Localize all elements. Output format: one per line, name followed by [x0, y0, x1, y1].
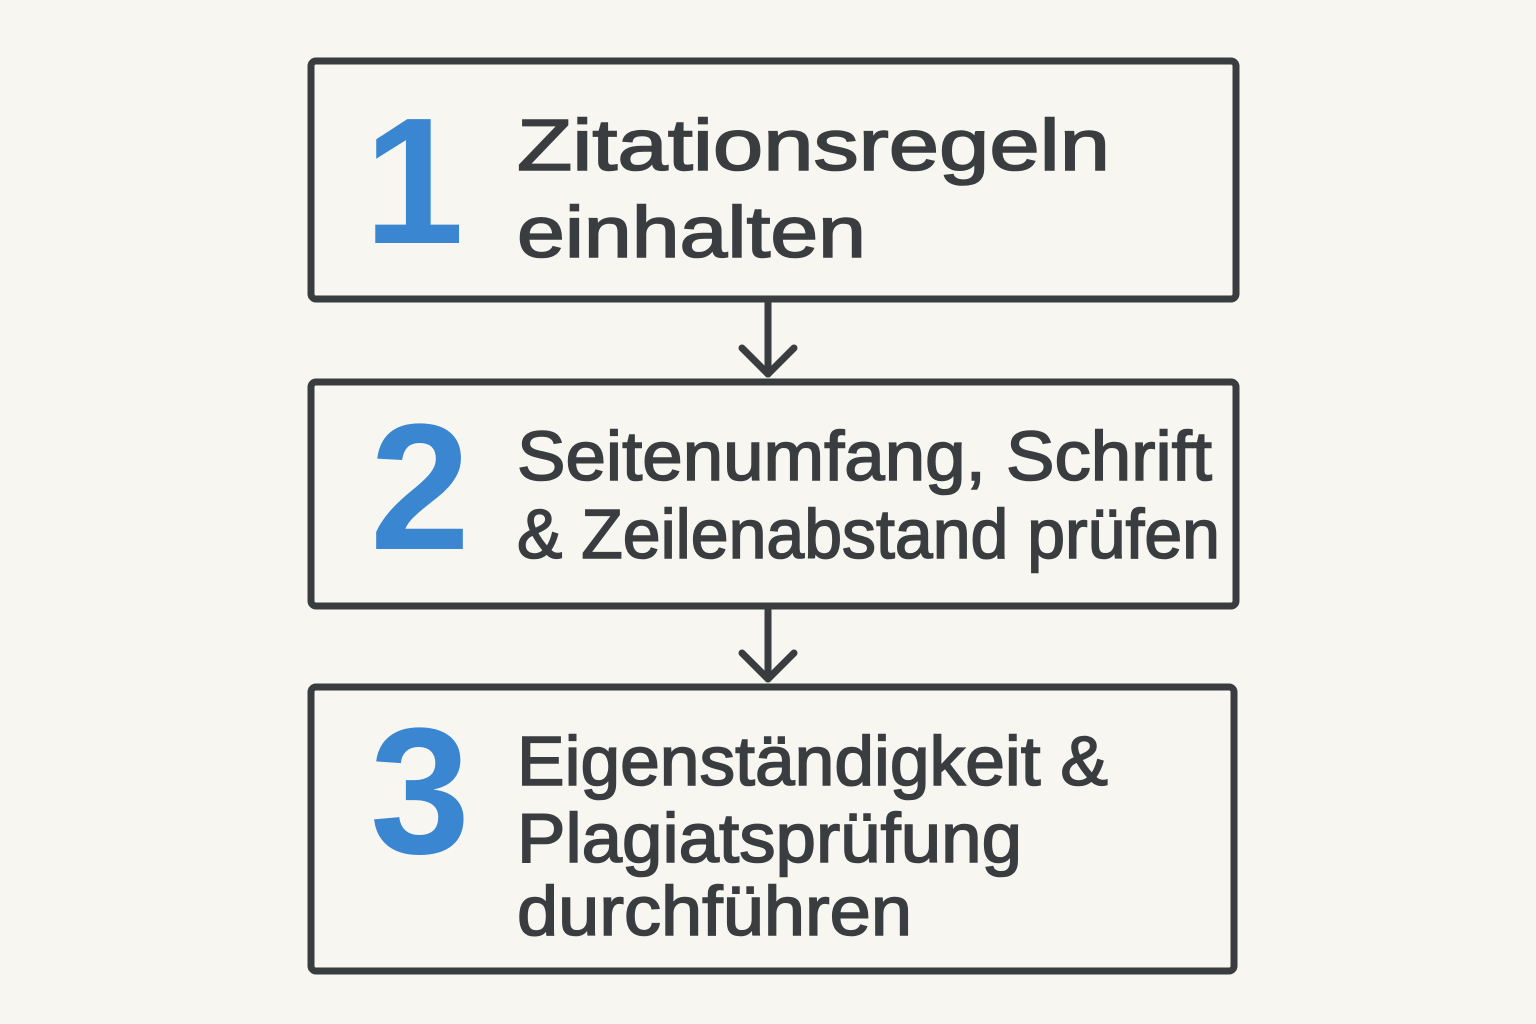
- arrow: 1 to 2: [742, 302, 794, 374]
- text: step 3: durchführen: [517, 872, 912, 950]
- text: step 2: Seitenumfang, Schrift: [517, 417, 1212, 495]
- text: step 2: [517, 417, 1220, 573]
- text: step 1: einhalten: [517, 193, 866, 273]
- number 3: 3: [370, 691, 470, 892]
- arrow: 2 to 3: [742, 609, 794, 679]
- text: step 3: Plagiatsprüfung: [517, 799, 1022, 877]
- text: step 1: [517, 106, 1110, 273]
- text: step 3: Eigenständigkeit &: [517, 722, 1108, 800]
- text: step 1: Zitationsregeln: [517, 106, 1110, 186]
- number 1: 1: [364, 81, 464, 282]
- text: step 3: [517, 722, 1108, 950]
- panel: step 1: [311, 61, 1236, 299]
- number 2: 2: [370, 387, 470, 588]
- panel: step 2: [311, 382, 1236, 606]
- text: step 2: & Zeilenabstand prüfen: [517, 495, 1220, 573]
- panel: step 3: [311, 687, 1234, 971]
